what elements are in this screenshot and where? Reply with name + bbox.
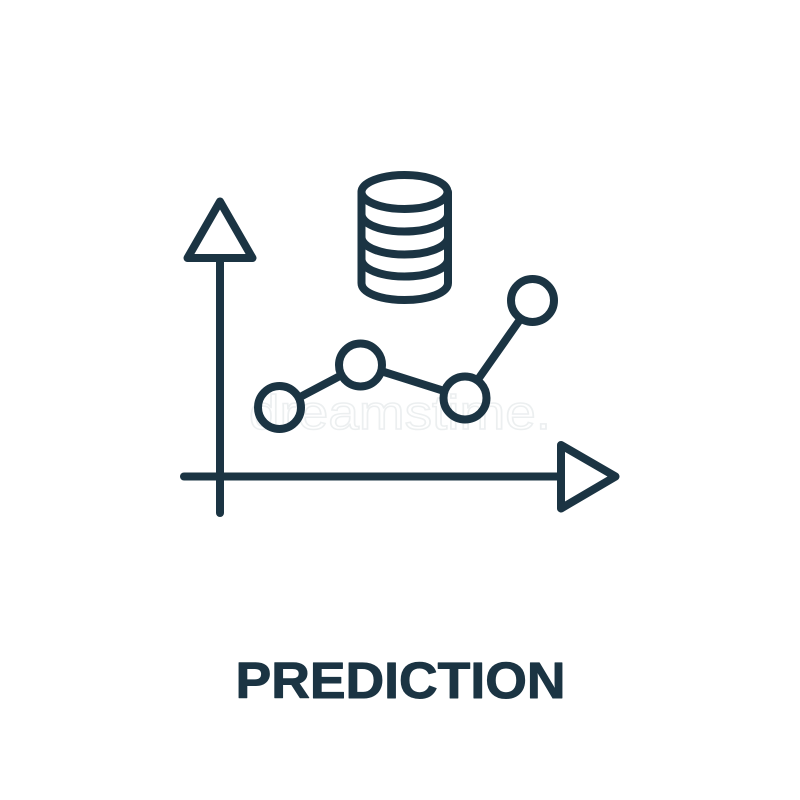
arrow: horizontal axis	[184, 445, 616, 508]
icon: database stack	[362, 175, 448, 300]
title: PREDICTION	[236, 652, 566, 709]
watermark: dreamstime.	[249, 387, 551, 440]
line chart with data points	[258, 279, 554, 429]
arrow: vertical axis	[188, 202, 252, 513]
icon: prediction chart	[184, 175, 616, 513]
